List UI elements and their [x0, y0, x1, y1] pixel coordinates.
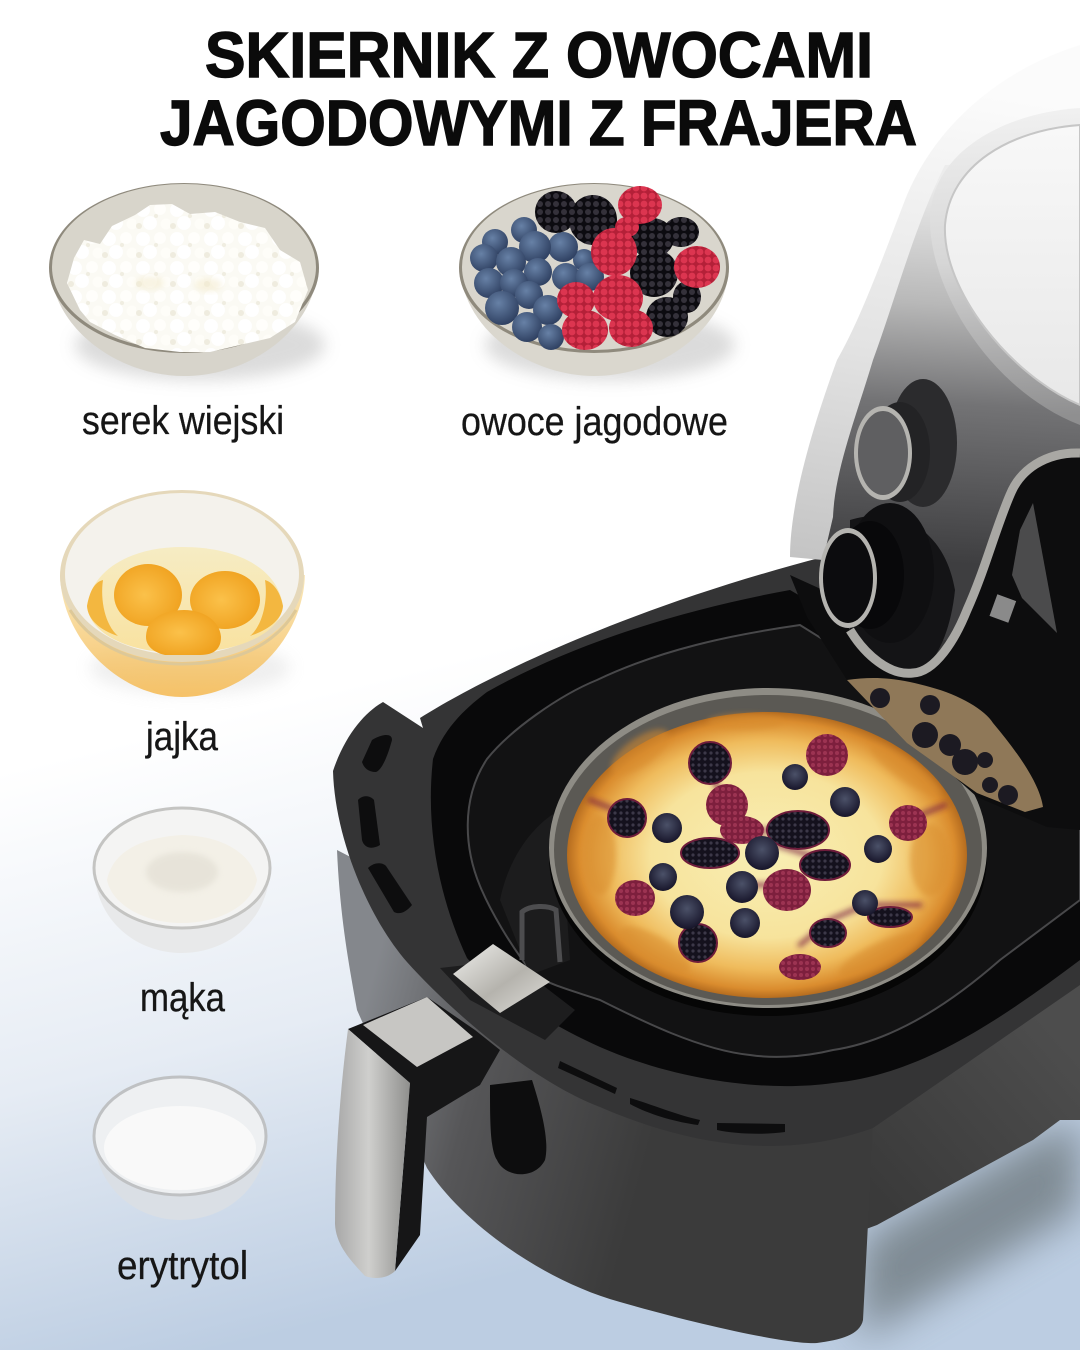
cake reflection	[847, 678, 1043, 812]
inner tray	[468, 625, 1080, 1057]
label: erytrytol: erytrytol	[117, 1244, 248, 1288]
label: jajka: jajka	[145, 715, 219, 759]
black lower lid	[790, 453, 1080, 830]
blackberries	[535, 191, 701, 337]
handle connector	[440, 944, 575, 1040]
ingredient: cottage cheese	[49, 183, 325, 443]
ingredient: eggs	[60, 490, 305, 759]
ingredient: berries	[459, 183, 735, 444]
glass bowl with flour	[94, 808, 270, 953]
small reflection square	[989, 594, 1016, 623]
raspberries in cake	[615, 734, 927, 980]
cake pan	[549, 688, 987, 1016]
air fryer	[333, 45, 1080, 1343]
cheesecake	[567, 712, 967, 998]
upper dial	[854, 379, 957, 507]
glass bowl with erythritol	[94, 1077, 267, 1220]
blackberries in cake	[608, 742, 912, 962]
label: serek wiejski: serek wiejski	[82, 399, 284, 443]
title	[160, 19, 917, 159]
ingredient: flour	[94, 808, 270, 1020]
handle	[335, 997, 500, 1278]
ingredient: erythritol	[94, 1077, 267, 1288]
lid ring	[930, 108, 1080, 425]
berry juice	[590, 770, 945, 945]
fryer top unit	[790, 45, 1080, 830]
control panel	[823, 160, 1080, 640]
golden crust patches	[584, 714, 950, 985]
title: SKIERNIK Z OWOCAMI	[205, 19, 873, 91]
outer shell	[790, 45, 1080, 620]
bowl: berries	[459, 183, 735, 380]
basket rim	[333, 557, 1080, 1146]
dark area around lower dial	[850, 516, 955, 673]
label: owoce jagodowe: owoce jagodowe	[461, 400, 728, 444]
bowl: stoneware	[49, 183, 325, 380]
mesh grill	[500, 810, 570, 975]
handle grip stub	[490, 1080, 546, 1174]
title: JAGODOWYMI Z FRAJERA	[160, 87, 917, 159]
rim side clip vents	[358, 735, 785, 1134]
blueberries	[470, 217, 604, 350]
fryer front panel	[337, 850, 873, 1343]
white lid	[945, 125, 1080, 405]
blueberries in cake	[649, 764, 892, 938]
silver trim curve	[850, 453, 1080, 673]
fryer side wall	[850, 975, 1080, 1235]
floor shadow	[860, 1120, 1080, 1340]
cottage cheese curds	[67, 204, 308, 352]
panel reflection	[1012, 503, 1057, 633]
raspberries	[557, 186, 720, 350]
glass bowl with eggs	[60, 490, 305, 697]
black cavity	[431, 590, 1080, 1086]
lower dial	[819, 503, 934, 643]
label: mąka: mąka	[140, 976, 226, 1020]
